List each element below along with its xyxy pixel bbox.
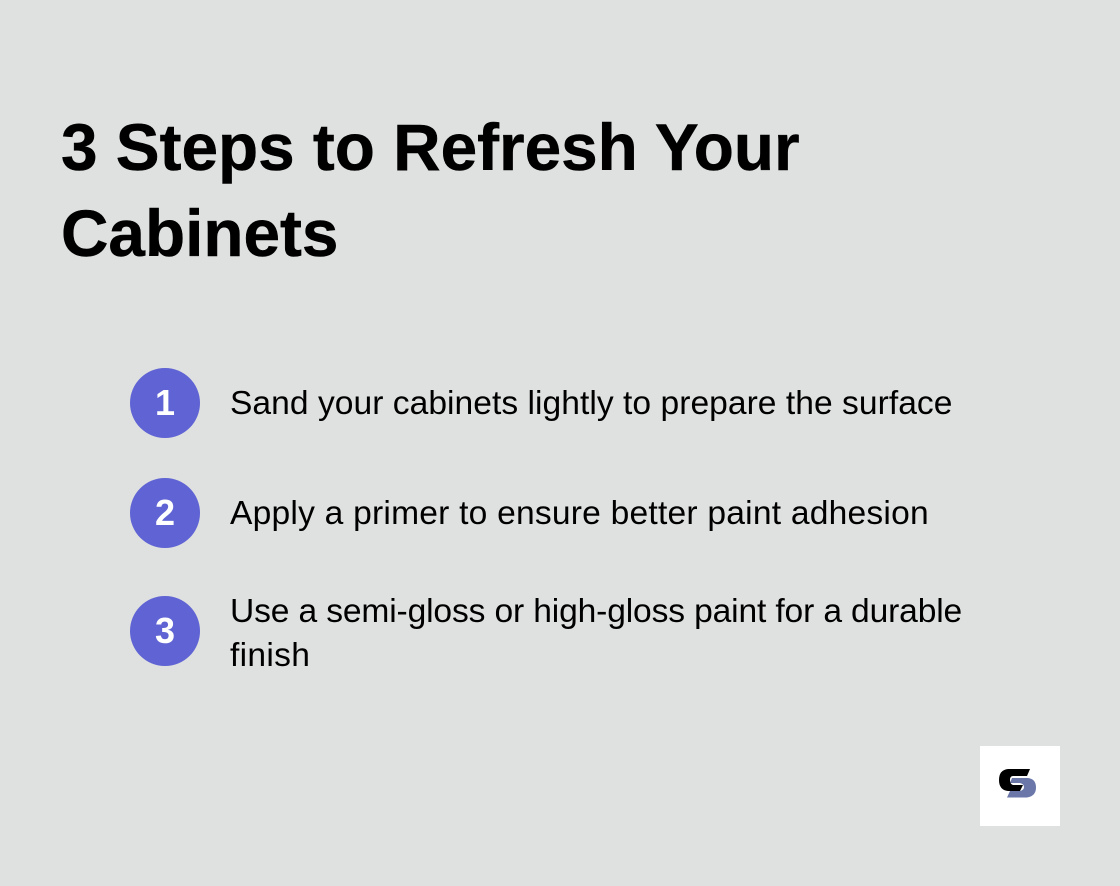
logo blue stroke	[1007, 778, 1036, 798]
step 3 text: Use a semi-gloss or high-gloss paint for a durable	[230, 593, 962, 630]
step 3	[130, 593, 962, 674]
logo badge	[980, 746, 1060, 826]
step 1 text: Sand your cabinets lightly to prepare the surface	[230, 385, 952, 422]
step 2 number badge	[130, 478, 200, 548]
step 1 number badge: 1	[155, 382, 175, 423]
step 2 number badge: 2	[155, 492, 175, 533]
step 1 number badge	[130, 368, 200, 438]
title	[61, 111, 800, 270]
logo black stroke	[999, 769, 1030, 791]
step 3 text	[230, 593, 962, 674]
step 1	[130, 368, 952, 438]
step 3 number badge: 3	[155, 610, 175, 651]
step 2	[130, 478, 929, 548]
step 2 text: Apply a primer to ensure better paint adhesion	[230, 495, 929, 532]
step 3 text: finish	[230, 637, 310, 674]
step 3 number badge	[130, 596, 200, 666]
title: 3 Steps to Refresh Your	[61, 111, 800, 184]
title: Cabinets	[61, 197, 338, 270]
